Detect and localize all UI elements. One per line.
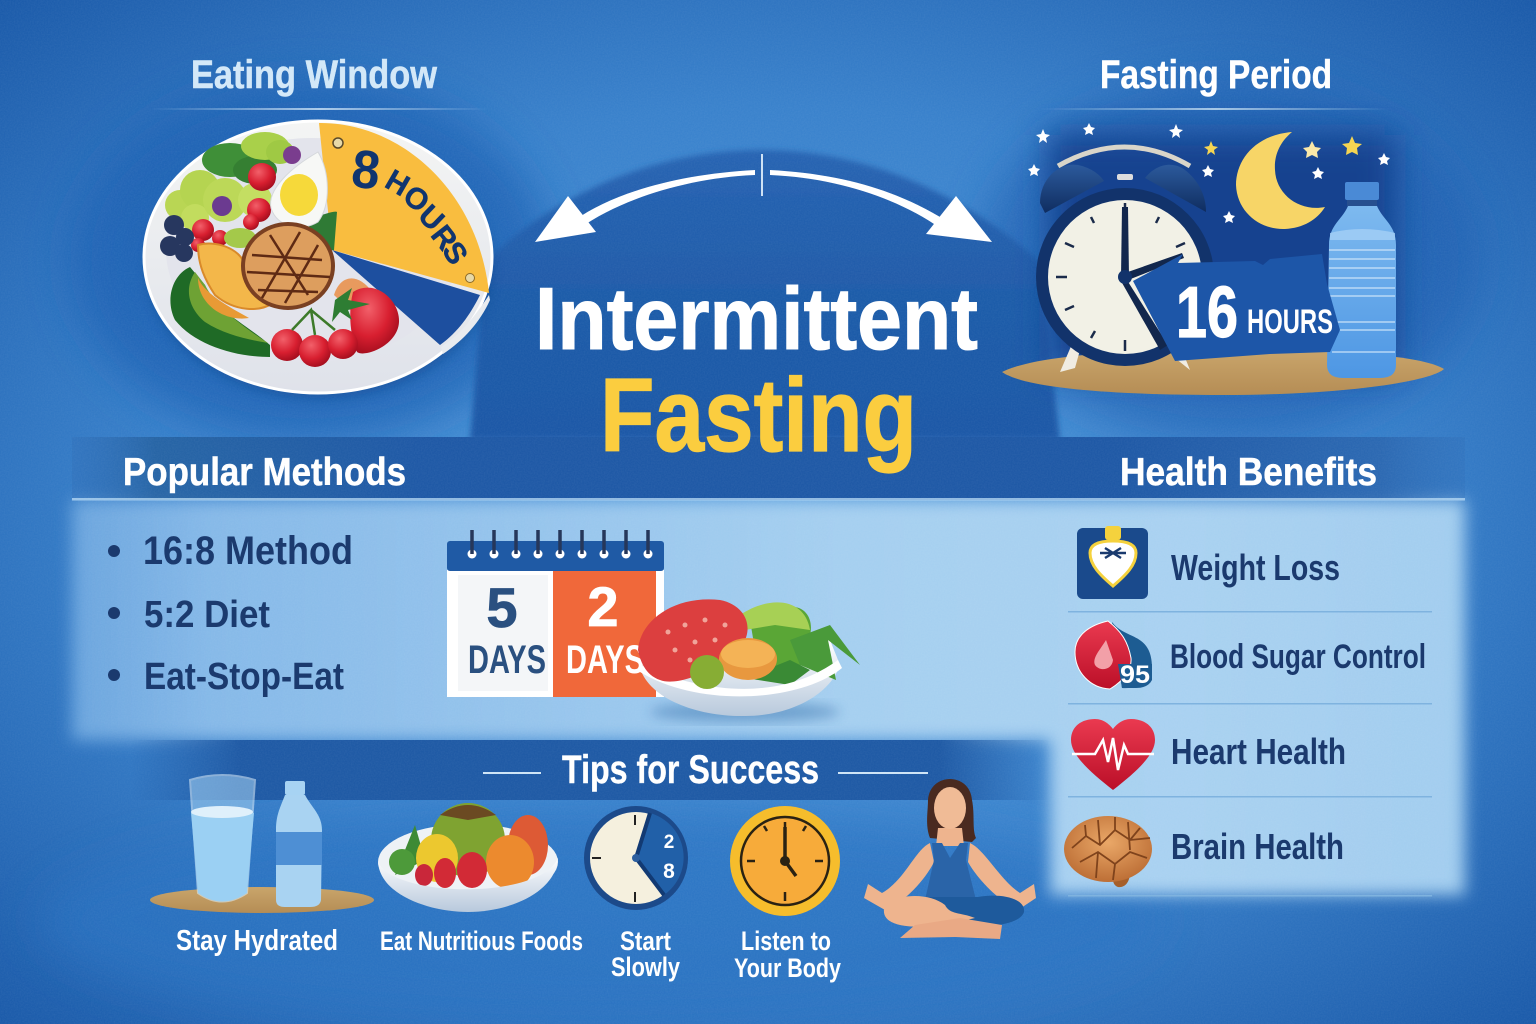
panel: health benefits list: Weight Loss <box>1171 547 1340 588</box>
panel: health benefits list: Blood Sugar Control <box>1170 638 1426 676</box>
grilled patty <box>243 224 333 308</box>
yellow eating sector: H <box>380 164 415 203</box>
icon: calendar 5 days 2 days: 2 <box>587 575 619 638</box>
panel: tips band <box>130 740 1050 800</box>
16 hours tag: 16 <box>1176 273 1238 353</box>
yellow eating sector: O <box>397 179 435 219</box>
yellow eating sector: 8 <box>349 139 383 201</box>
icon: blood sugar drop <box>1075 621 1152 689</box>
label: start slowly: Start <box>620 926 671 956</box>
icon: heart with pulse <box>1071 719 1155 790</box>
icon: woman meditating <box>864 779 1036 939</box>
icon: yellow clock <box>730 806 840 916</box>
list: popular methods: 5:2 Diet <box>144 594 270 636</box>
label: start slowly <box>611 926 680 982</box>
panel: health benefits list: Brain Health <box>1171 826 1344 867</box>
label: listen to your body <box>734 926 841 983</box>
list: popular methods: 16:8 Method <box>143 529 353 573</box>
icon: calendar 5 days 2 days: 5 <box>486 576 518 639</box>
title <box>535 269 978 474</box>
label: listen to your body: Listen to <box>741 926 831 956</box>
blue fasting sector <box>332 250 480 345</box>
heading: fasting period: Fasting Period <box>1100 53 1332 97</box>
16 hours tag: HOURS <box>1247 303 1333 341</box>
cherries and tomato <box>271 278 399 367</box>
moon <box>1236 132 1325 229</box>
avocado and bread <box>170 244 273 357</box>
panel: methods and benefits area <box>72 500 1465 895</box>
heading: eating window: Eating Window <box>191 53 438 97</box>
title: Fasting <box>600 358 917 474</box>
icon: night scene with alarm clock <box>1002 123 1444 395</box>
egg <box>271 152 327 227</box>
heading: health benefits: Health Benefits <box>1120 451 1377 494</box>
list: popular methods <box>108 529 353 698</box>
icon: bowl of fruits and vegetables <box>378 803 558 912</box>
alarm clock <box>1036 147 1214 372</box>
stars <box>1028 123 1390 223</box>
label: stay hydrated: Stay Hydrated <box>176 925 338 957</box>
label: listen to your body: Your Body <box>734 953 841 983</box>
icon: calendar 5 days 2 days: DAYS <box>468 638 546 682</box>
panel: health benefits list: Heart Health <box>1171 731 1346 772</box>
heading: tips for success: Tips for Success <box>562 748 819 792</box>
icon: small clock 16:8: 2 <box>664 832 674 853</box>
icon: plate with 8 hours eating window <box>144 121 492 398</box>
icon: calendar 5 days 2 days: DAYS <box>566 638 644 682</box>
list: popular methods: Eat-Stop-Eat <box>144 656 344 698</box>
panel: health benefits list <box>1064 526 1432 896</box>
yellow eating sector: S <box>435 236 474 270</box>
title: Intermittent <box>535 269 978 368</box>
panel: central title dome <box>470 150 1060 440</box>
16 hours tag <box>1133 254 1340 361</box>
heading: popular methods: Popular Methods <box>123 451 406 494</box>
yellow eating sector <box>319 123 489 293</box>
icon: weight loss badge <box>1077 526 1148 599</box>
icon: calendar 5 days 2 days <box>447 530 664 697</box>
label: start slowly: Slowly <box>611 952 680 982</box>
label: eat nutritious foods: Eat Nutritious Foods <box>380 926 583 956</box>
water bottle <box>1327 182 1396 378</box>
greens <box>160 132 337 262</box>
icon: fruit salad bowl <box>638 599 860 722</box>
icon: small clock 16:8 <box>584 806 688 910</box>
icon: small clock 16:8: 8 <box>663 860 675 883</box>
icon: water glass and bottle on wood <box>150 775 374 913</box>
icon: blood sugar drop: 95 <box>1120 661 1150 689</box>
yellow eating sector: R <box>424 219 464 257</box>
icon: brain <box>1064 816 1152 887</box>
icon: double arrows <box>535 154 992 242</box>
panel: header band <box>72 437 1465 500</box>
yellow eating sector: U <box>412 199 450 237</box>
wooden table <box>1002 350 1444 395</box>
